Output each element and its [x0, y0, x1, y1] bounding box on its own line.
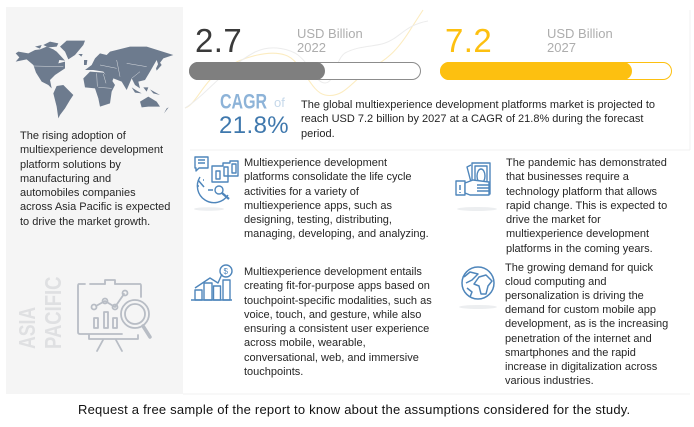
text: pandemic technology platform: [506, 157, 667, 255]
text: custom mobile app demand: The growing demand for quick: [505, 262, 653, 274]
bar: 2027: [440, 62, 672, 80]
text: market summary: period.: [301, 128, 335, 140]
text: life cycle activities: [244, 157, 429, 240]
label: Asia Pacific vertical heading: PACIFIC: [41, 276, 67, 349]
text: Asia Pacific description: manufacturing and: [20, 173, 111, 185]
callout: CAGR: 21.8%: [219, 112, 289, 139]
text: fit-for-purpose apps: touchpoints.: [244, 366, 303, 378]
text: custom mobile app demand: penetration of the internet and: [505, 333, 652, 345]
text: custom mobile app demand: demand for custom mobile app: [505, 304, 656, 316]
text: life cycle activities: activities for a variety of: [244, 186, 359, 198]
label: Asia Pacific vertical heading: [15, 276, 67, 349]
text: life cycle activities: designing, testing, distributing,: [244, 214, 392, 226]
text: pandemic technology platform: rapid change. This is expected to: [506, 200, 667, 212]
text: custom mobile app demand: various industries.: [505, 375, 594, 387]
text: Asia Pacific description: multiexperience development: [20, 144, 163, 156]
icon: lifecycle analytics: [194, 156, 239, 211]
text: fit-for-purpose apps: touchpoint-specific modalities, such as: [244, 295, 432, 307]
icon: globe: [459, 266, 497, 309]
text: pandemic technology platform: platforms in the coming years.: [506, 243, 653, 255]
text: custom mobile app demand: smartphones and the rapid: [505, 347, 636, 359]
text: pandemic technology platform: multiexperience development: [506, 228, 649, 240]
text: Asia Pacific description: to drive the market growth.: [20, 216, 150, 228]
label: USD Billion 2022: [297, 26, 363, 55]
text: Asia Pacific description: platform solutions by: [20, 159, 121, 171]
text: fit-for-purpose apps: across mobile, wearable,: [244, 337, 366, 349]
text: market summary: [301, 99, 655, 140]
text: Asia Pacific description: [20, 130, 170, 228]
stat: 2022 value: 2.7: [195, 22, 242, 59]
icon: growth chart with dollar coin: [191, 264, 233, 301]
text: life cycle activities: multiexperience apps, such as: [244, 200, 392, 212]
text: Asia Pacific description: across Asia Pacific is expected: [20, 201, 170, 213]
text: market summary: The global multiexperience development platforms market is projected to: [301, 99, 655, 111]
text: pandemic technology platform: technology platform that allows: [506, 186, 657, 198]
icon: world map: [16, 40, 174, 118]
text: life cycle activities: managing, developing, and analyzing.: [244, 228, 429, 240]
text: pandemic technology platform: drive the market for: [506, 214, 601, 226]
label: USD Billion 2022: USD Billion: [297, 26, 363, 41]
caption: sample report note: Request a free sample of the report to know about the assumptions considered for the study.: [78, 402, 630, 417]
label: USD Billion 2027: 2027: [547, 40, 576, 55]
icon: hand holding money: [455, 162, 497, 211]
text: life cycle activities: platforms consolidate the life cycle: [244, 171, 412, 183]
text: custom mobile app demand: development, as is the increasing: [505, 318, 668, 330]
callout: CAGR: [219, 90, 289, 139]
icon: presentation board with magnifier: [77, 279, 152, 352]
text: custom mobile app demand: increase in digitalization across: [505, 361, 657, 373]
text: fit-for-purpose apps: ensuring a consistent user experience: [244, 323, 429, 335]
callout: CAGR: CAGR: [220, 90, 267, 114]
text: fit-for-purpose apps: conversational, web, and immersive: [244, 352, 419, 364]
icon: growth chart with dollar coin: $: [224, 267, 228, 276]
text: fit-for-purpose apps: [244, 266, 432, 378]
text: fit-for-purpose apps: creating fit-for-purpose apps based on: [244, 280, 430, 292]
text: life cycle activities: Multiexperience development: [244, 157, 387, 169]
callout: CAGR: of: [274, 95, 285, 110]
bar: 2022: [189, 62, 421, 80]
panel: Asia Pacific sidebar: [6, 7, 183, 394]
label: USD Billion 2022: 2022: [297, 40, 326, 55]
stat: 2027 value: 7.2: [445, 22, 492, 59]
text: custom mobile app demand: [505, 262, 668, 387]
text: pandemic technology platform: that businesses require a: [506, 171, 629, 183]
text: custom mobile app demand: cloud computing and: [505, 276, 607, 288]
text: market summary: reach USD 7.2 billion by 2027 at a CAGR of 21.8% during the forecast: [301, 113, 643, 125]
label: USD Billion 2027: USD Billion: [547, 26, 613, 41]
text: fit-for-purpose apps: Multiexperience development entails: [244, 266, 422, 278]
text: custom mobile app demand: personalization is driving the: [505, 290, 644, 302]
text: Asia Pacific description: The rising adoption of: [20, 130, 126, 142]
text: Asia Pacific description: automobiles companies: [20, 187, 136, 199]
text: pandemic technology platform: The pandemic has demonstrated: [506, 157, 667, 169]
label: Asia Pacific vertical heading: ASIA: [15, 307, 41, 349]
text: fit-for-purpose apps: voice, touch, and gesture, while also: [244, 309, 421, 321]
label: USD Billion 2027: [547, 26, 613, 55]
